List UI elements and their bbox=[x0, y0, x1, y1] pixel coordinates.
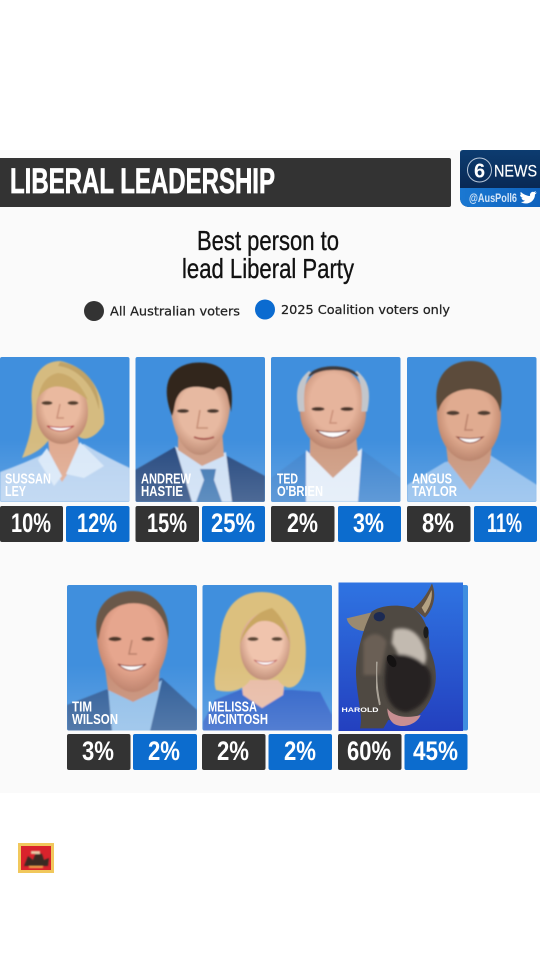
value: Angus Taylor coalition voters: 11% bbox=[487, 508, 522, 538]
candidate card: Andrew Hastie: HASTIE bbox=[141, 483, 183, 500]
value: Sussan Ley all voters: 10% bbox=[11, 508, 51, 538]
value: Ted O'Brien all voters bbox=[271, 506, 334, 542]
value: Harold all voters: 60% bbox=[347, 736, 391, 766]
value: Ted O'Brien coalition voters: 3% bbox=[353, 508, 384, 538]
heading: Best person to lead Liberal Party bbox=[182, 225, 354, 284]
background panel bbox=[0, 150, 540, 793]
value: Sussan Ley coalition voters bbox=[66, 506, 130, 542]
value: Tim Wilson all voters: 3% bbox=[82, 736, 114, 766]
value: Ted O'Brien coalition voters bbox=[338, 506, 401, 542]
legend bbox=[84, 300, 451, 321]
value: Sussan Ley coalition voters: 12% bbox=[77, 508, 117, 538]
candidate card: Ted O'Brien: O'BRIEN bbox=[277, 483, 323, 500]
heading: Best person to lead Liberal Party: Best person to bbox=[197, 225, 339, 256]
candidate card: Andrew Hastie bbox=[135, 357, 265, 502]
value: Tim Wilson coalition voters: 2% bbox=[148, 736, 180, 766]
value: Angus Taylor all voters: 8% bbox=[422, 508, 454, 538]
candidate card: Melissa McIntosh: MCINTOSH bbox=[208, 711, 268, 728]
candidate card: Ted O'Brien: TED bbox=[277, 470, 298, 488]
value: Sussan Ley all voters bbox=[0, 506, 63, 542]
candidate card: Tim Wilson: WILSON bbox=[72, 711, 118, 728]
value: Tim Wilson coalition voters bbox=[133, 734, 197, 770]
value: Melissa McIntosh all voters: 2% bbox=[217, 736, 249, 766]
candidate card: Melissa McIntosh: MELISSA bbox=[208, 699, 257, 716]
value: Angus Taylor coalition voters bbox=[474, 506, 537, 542]
value: Andrew Hastie coalition voters: 25% bbox=[211, 508, 255, 538]
value: Ted O'Brien all voters: 2% bbox=[287, 508, 318, 538]
candidate card: Melissa McIntosh bbox=[202, 585, 333, 731]
candidate card: Harold the donkey: HAROLD bbox=[342, 708, 379, 714]
header bar: title bbox=[0, 158, 451, 207]
candidate card: Sussan Ley bbox=[0, 357, 130, 502]
candidate card: Andrew Hastie: ANDREW bbox=[141, 470, 192, 488]
value: Angus Taylor all voters bbox=[407, 506, 470, 542]
logo: 6 News: @AusPoll6 bbox=[469, 193, 517, 205]
icon: small red badge bbox=[18, 843, 54, 873]
value: Harold coalition voters: 45% bbox=[413, 736, 458, 766]
candidate card: Angus Taylor: TAYLOR bbox=[412, 483, 457, 500]
candidate card: Tim Wilson bbox=[67, 585, 197, 731]
value: Andrew Hastie all voters bbox=[136, 506, 199, 542]
legend: All Australian voters bbox=[110, 304, 240, 318]
header bar: title: LIBERAL LEADERSHIP bbox=[10, 162, 275, 201]
candidate card: Harold the donkey bbox=[338, 582, 468, 731]
logo: 6 News: 6 bbox=[474, 160, 485, 182]
candidate card: Sussan Ley: LEY bbox=[5, 483, 26, 500]
logo: 6 News bbox=[460, 150, 540, 207]
candidate card: Angus Taylor: ANGUS bbox=[412, 470, 452, 488]
candidate card: Sussan Ley: SUSSAN bbox=[5, 470, 51, 488]
value: Andrew Hastie all voters: 15% bbox=[147, 508, 187, 538]
value: Melissa McIntosh all voters bbox=[202, 734, 266, 770]
candidate card: Angus Taylor bbox=[407, 357, 537, 502]
value: Melissa McIntosh coalition voters: 2% bbox=[284, 736, 316, 766]
candidate card: Ted O'Brien bbox=[271, 357, 401, 502]
candidate card: Tim Wilson: TIM bbox=[72, 699, 92, 716]
legend: 2025 Coalition voters only bbox=[281, 302, 451, 317]
value: Tim Wilson all voters bbox=[67, 734, 130, 770]
value: Melissa McIntosh coalition voters bbox=[268, 734, 332, 770]
heading: Best person to lead Liberal Party: lead Liberal Party bbox=[182, 253, 354, 284]
